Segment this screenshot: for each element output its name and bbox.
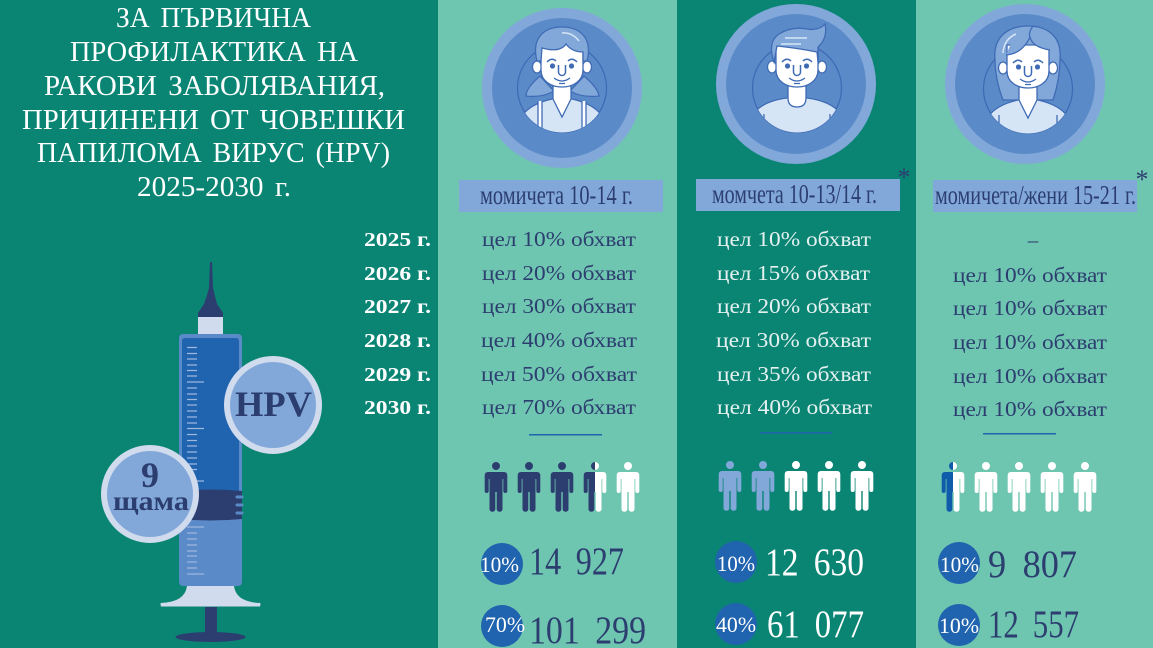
panel: left background xyxy=(0,0,438,648)
title: ПРИЧИНЕНИ ОТ ЧОВЕШКИ xyxy=(22,105,405,136)
pictogram: boys 2 of 5 xyxy=(719,461,873,511)
targets: boys: цел 35% обхват xyxy=(717,362,871,386)
targets: girls and women: цел 10% обхват xyxy=(953,330,1107,354)
stat: boys 40%: 61 077 xyxy=(767,603,864,646)
label: girls 10-14: момичета 10-14 г. xyxy=(480,180,633,210)
badge: 9 strains: щама xyxy=(113,486,190,516)
targets: girls: цел 50% обхват xyxy=(481,362,637,386)
year labels: 2027 г. xyxy=(364,296,431,318)
stat: girls 70%: 70% xyxy=(485,612,525,637)
targets: boys xyxy=(716,227,872,419)
targets: girls: цел 20% обхват xyxy=(482,261,636,285)
badge: HPV: HPV xyxy=(235,384,312,424)
year labels: 2029 г. xyxy=(364,364,431,386)
targets: girls and women xyxy=(953,228,1107,421)
title: ЗА ПЪРВИЧНА xyxy=(116,3,312,34)
stat: girls/women 10% second xyxy=(938,603,1079,646)
icon: syringe xyxy=(160,262,260,642)
label: boys 10-13/14: момчета 10-13/14 г. xyxy=(712,179,877,209)
targets: boys: цел 20% обхват xyxy=(717,294,871,318)
targets: boys: цел 40% обхват xyxy=(717,395,872,419)
targets: girls and women: цел 10% обхват xyxy=(953,397,1107,421)
badge: HPV xyxy=(227,359,319,451)
asterisk: girls/women: * xyxy=(1136,165,1148,194)
panel: boys column xyxy=(677,0,916,648)
targets: boys: цел 10% обхват xyxy=(717,227,871,251)
avatar: boy xyxy=(716,4,876,164)
stat: boys 10%: 10% xyxy=(717,551,755,576)
title: ПРОФИЛАКТИКА НА xyxy=(70,37,359,68)
avatar: girl xyxy=(482,8,642,168)
year labels: 2026 г. xyxy=(364,263,431,285)
pictogram: girls/women 0.5 of 5 xyxy=(942,462,1096,512)
targets: girls: цел 40% обхват xyxy=(481,328,637,352)
asterisk: boys: * xyxy=(898,163,910,192)
stat: boys 40% xyxy=(715,603,864,646)
stat: girls/women 10% second: 10% xyxy=(939,613,979,638)
year labels: 2025 г. xyxy=(364,229,431,251)
badge: 9 strains xyxy=(104,448,196,540)
year labels: 2028 г. xyxy=(364,330,431,352)
panel: girls and women column xyxy=(916,0,1153,648)
title: ПАПИЛОМА ВИРУС (HPV) xyxy=(37,138,390,169)
title: РАКОВИ ЗАБОЛЯВАНИЯ, xyxy=(44,71,385,102)
stat: girls 10%: 14 927 xyxy=(529,540,624,583)
stat: girls/women 10%: 10% xyxy=(940,552,979,577)
stat: girls/women 10%: 9 807 xyxy=(988,543,1077,586)
targets: girls and women: цел 10% обхват xyxy=(953,364,1107,388)
pictogram: girls 3.5 of 5 xyxy=(485,462,639,512)
stat: boys 40%: 40% xyxy=(716,612,756,637)
panel: girls column xyxy=(438,0,677,648)
avatar: woman xyxy=(945,4,1105,164)
targets: boys: цел 30% обхват xyxy=(716,328,871,352)
targets: girls: цел 30% обхват xyxy=(482,294,636,318)
stat: girls 10% xyxy=(480,540,624,585)
targets: girls: цел 10% обхват xyxy=(482,227,636,251)
targets: girls and women: цел 10% обхват xyxy=(953,263,1107,287)
targets: girls: цел 70% обхват xyxy=(482,395,636,419)
title: 2025-2030 г. xyxy=(137,172,291,203)
targets: girls and women: – xyxy=(1027,228,1039,252)
targets: girls and women: цел 10% обхват xyxy=(953,296,1107,320)
stat: girls 70% xyxy=(481,605,646,648)
stat: girls/women 10% xyxy=(938,542,1077,586)
badge: 9 strains: 9 xyxy=(141,455,159,495)
stat: boys 10% xyxy=(715,541,864,584)
stat: boys 10%: 12 630 xyxy=(765,541,864,584)
targets: boys: цел 15% обхват xyxy=(717,261,870,285)
targets: girls xyxy=(481,227,637,419)
stat: girls/women 10% second: 12 557 xyxy=(988,603,1079,646)
year labels xyxy=(364,229,431,419)
year labels: 2030 г. xyxy=(364,397,431,419)
title xyxy=(22,3,405,203)
stat: girls 10%: 10% xyxy=(480,552,519,577)
